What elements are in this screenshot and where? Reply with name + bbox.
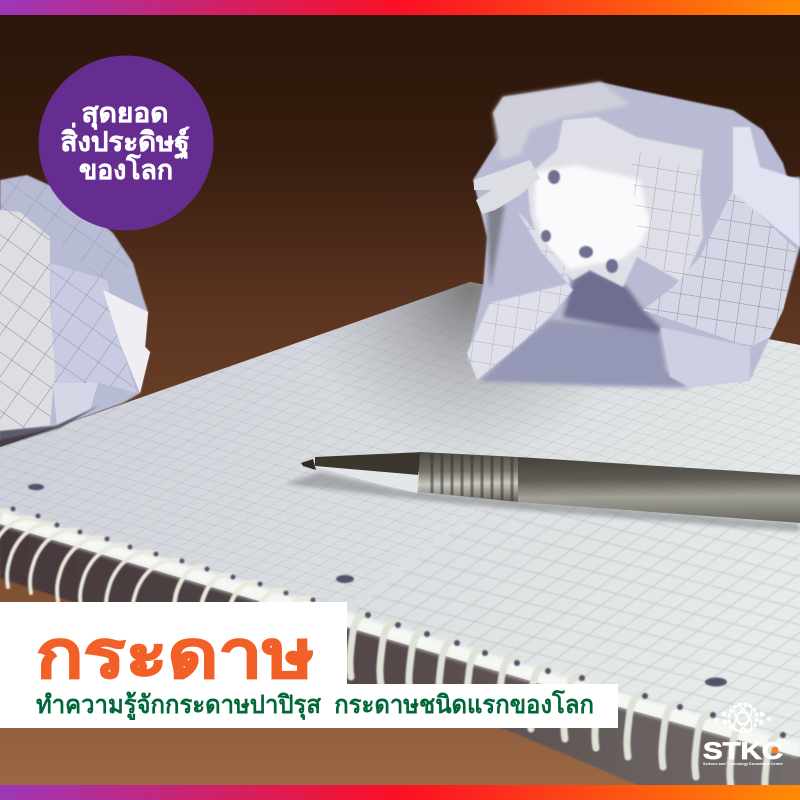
ball outline	[467, 82, 800, 387]
left ball lower facet	[53, 383, 98, 427]
left ball outline	[0, 175, 150, 440]
bottom gradient bar	[0, 785, 800, 800]
punched holes	[10, 484, 786, 738]
badge: purple circle	[38, 56, 214, 230]
top gradient bar	[0, 0, 800, 15]
ball upper-left lighter fold	[493, 82, 630, 160]
logo dot	[772, 746, 778, 754]
left ball mid facet	[50, 263, 137, 393]
ball bright highlight	[535, 165, 650, 270]
ball top-right bright fold	[733, 127, 800, 247]
logo: STKC	[703, 703, 783, 766]
ball left flap	[467, 210, 573, 380]
pen ribbed grip	[418, 452, 518, 502]
white title box	[0, 602, 347, 684]
left ball mid grid	[50, 263, 137, 393]
title: กระดาษ	[36, 617, 314, 691]
ball central grid	[630, 150, 700, 283]
page grid: near, out of focus	[350, 480, 800, 745]
logo wordmark: STKC	[703, 738, 783, 765]
badge text: ของโลก	[79, 153, 173, 185]
white subtitle strip	[0, 684, 618, 728]
notebook page	[0, 282, 800, 757]
spiral coils: out of focus	[350, 614, 783, 797]
crumpled paper ball: right	[467, 82, 800, 388]
pen barrel	[518, 457, 800, 523]
torn holes	[541, 170, 618, 273]
page white rim	[0, 517, 800, 750]
left ball outer flap	[103, 290, 150, 393]
badge text: สุดยอด	[82, 98, 168, 130]
badge text	[60, 98, 190, 185]
pen cone	[314, 452, 423, 493]
crumpled paper ball: left	[0, 175, 150, 447]
pen	[285, 452, 800, 532]
notebook binding edge	[0, 521, 800, 800]
pen tip	[301, 459, 316, 470]
notebook	[0, 282, 800, 800]
title panel	[0, 602, 618, 728]
cone dark upper	[315, 452, 423, 475]
ball shadow on page	[480, 320, 690, 388]
cone silver lower	[314, 466, 418, 493]
left ball base shadow	[0, 405, 100, 447]
pen shadow	[285, 472, 800, 532]
logo tagline: Science and Technology Knowledge Center	[703, 761, 783, 766]
ball left grid	[467, 210, 573, 380]
logo emblem	[715, 703, 771, 733]
subtitle: ทำความรู้จักกระดาษปาปิรุส กระดาษชนิดแรกของโลก	[36, 689, 594, 721]
ball left dark side	[487, 205, 505, 290]
ball lower right fold	[660, 327, 750, 387]
ball right flap	[643, 190, 797, 347]
badge text: สิ่งประดิษฐ์	[60, 122, 190, 160]
spiral coils	[0, 511, 340, 667]
left ball front grid	[0, 210, 55, 431]
ball dark cavity	[563, 270, 663, 333]
page grid: far	[0, 282, 800, 610]
left ball back grid	[0, 175, 133, 280]
page far-corner shade	[0, 282, 800, 480]
left ball front folds	[0, 210, 55, 431]
torn paper scraps	[474, 160, 540, 214]
ball central fold	[527, 117, 703, 287]
